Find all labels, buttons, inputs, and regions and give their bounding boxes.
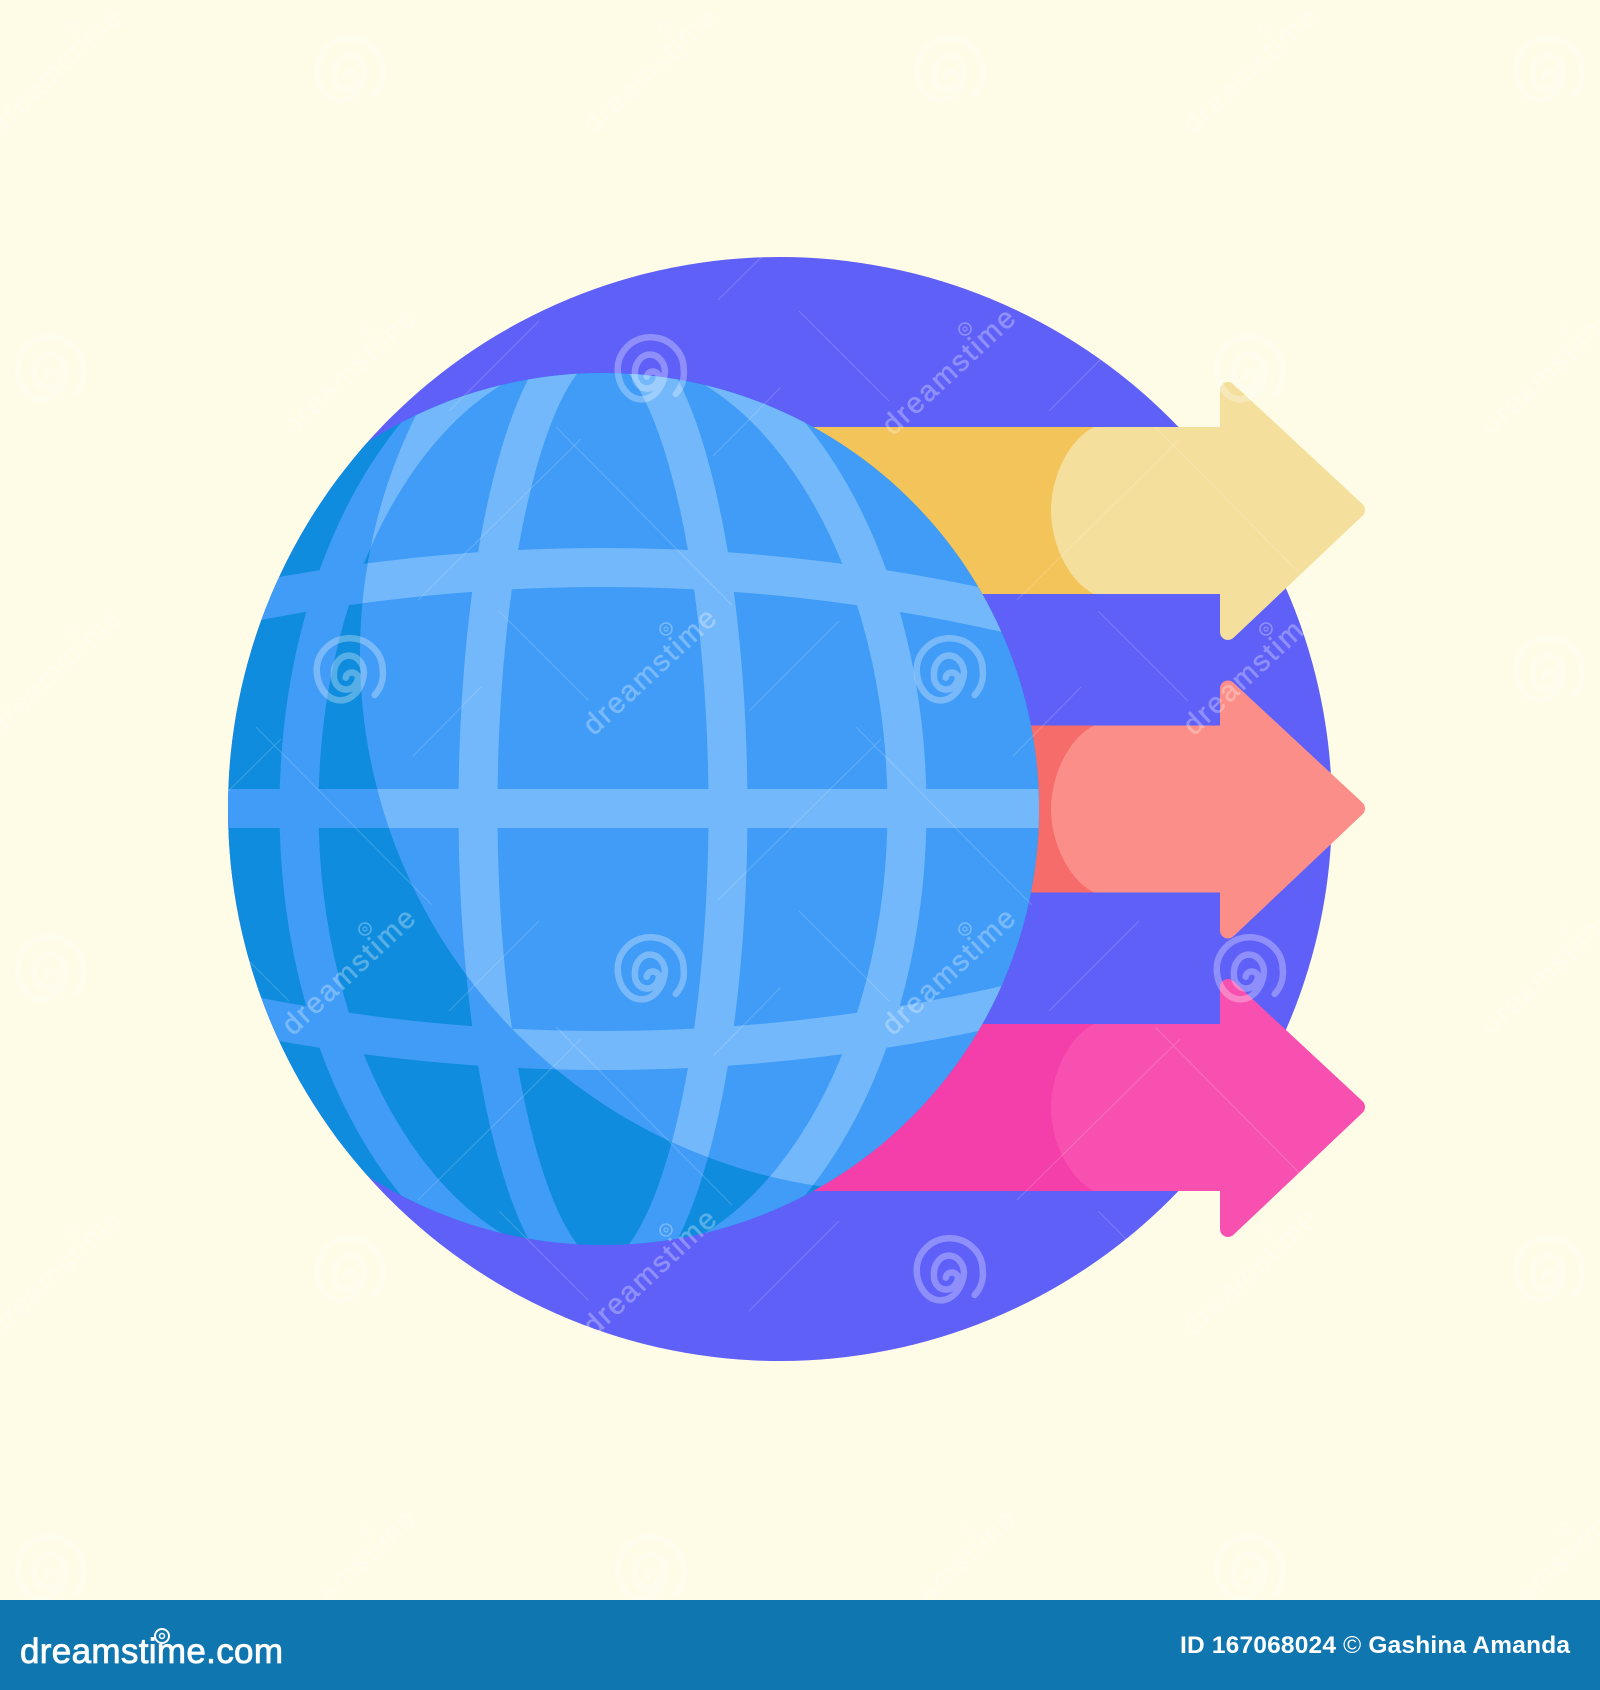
footer logo: dreamstime.com (20, 1632, 283, 1671)
watermark overlay: dreamstime (1177, 1, 1323, 141)
watermark overlay: dreamstime (577, 602, 723, 742)
watermark overlay: dreamstime (1177, 1203, 1323, 1343)
watermark overlay: dreamstime (1177, 602, 1323, 742)
watermark overlay: dreamstime (276, 302, 422, 442)
watermark overlay: dreamstime (577, 1, 723, 141)
watermark overlay: dreamstime (577, 1203, 723, 1343)
arrow: coral (700, 688, 1357, 930)
arrow: pink (700, 987, 1357, 1229)
footer credit: ID 167068024 © Gashina Amanda (1180, 1632, 1570, 1659)
watermark overlay: dreamstime (876, 1503, 1022, 1643)
watermark overlay: dreamstime (876, 302, 1022, 442)
watermark overlay: dreamstime (276, 902, 422, 1042)
globe (228, 373, 1039, 1245)
background purple circle (228, 257, 1332, 1361)
footer bar (0, 1600, 1600, 1690)
watermark overlay: dreamstime (276, 1503, 422, 1643)
watermark overlay: dreamstime (876, 902, 1022, 1042)
arrow: yellow (700, 390, 1357, 632)
